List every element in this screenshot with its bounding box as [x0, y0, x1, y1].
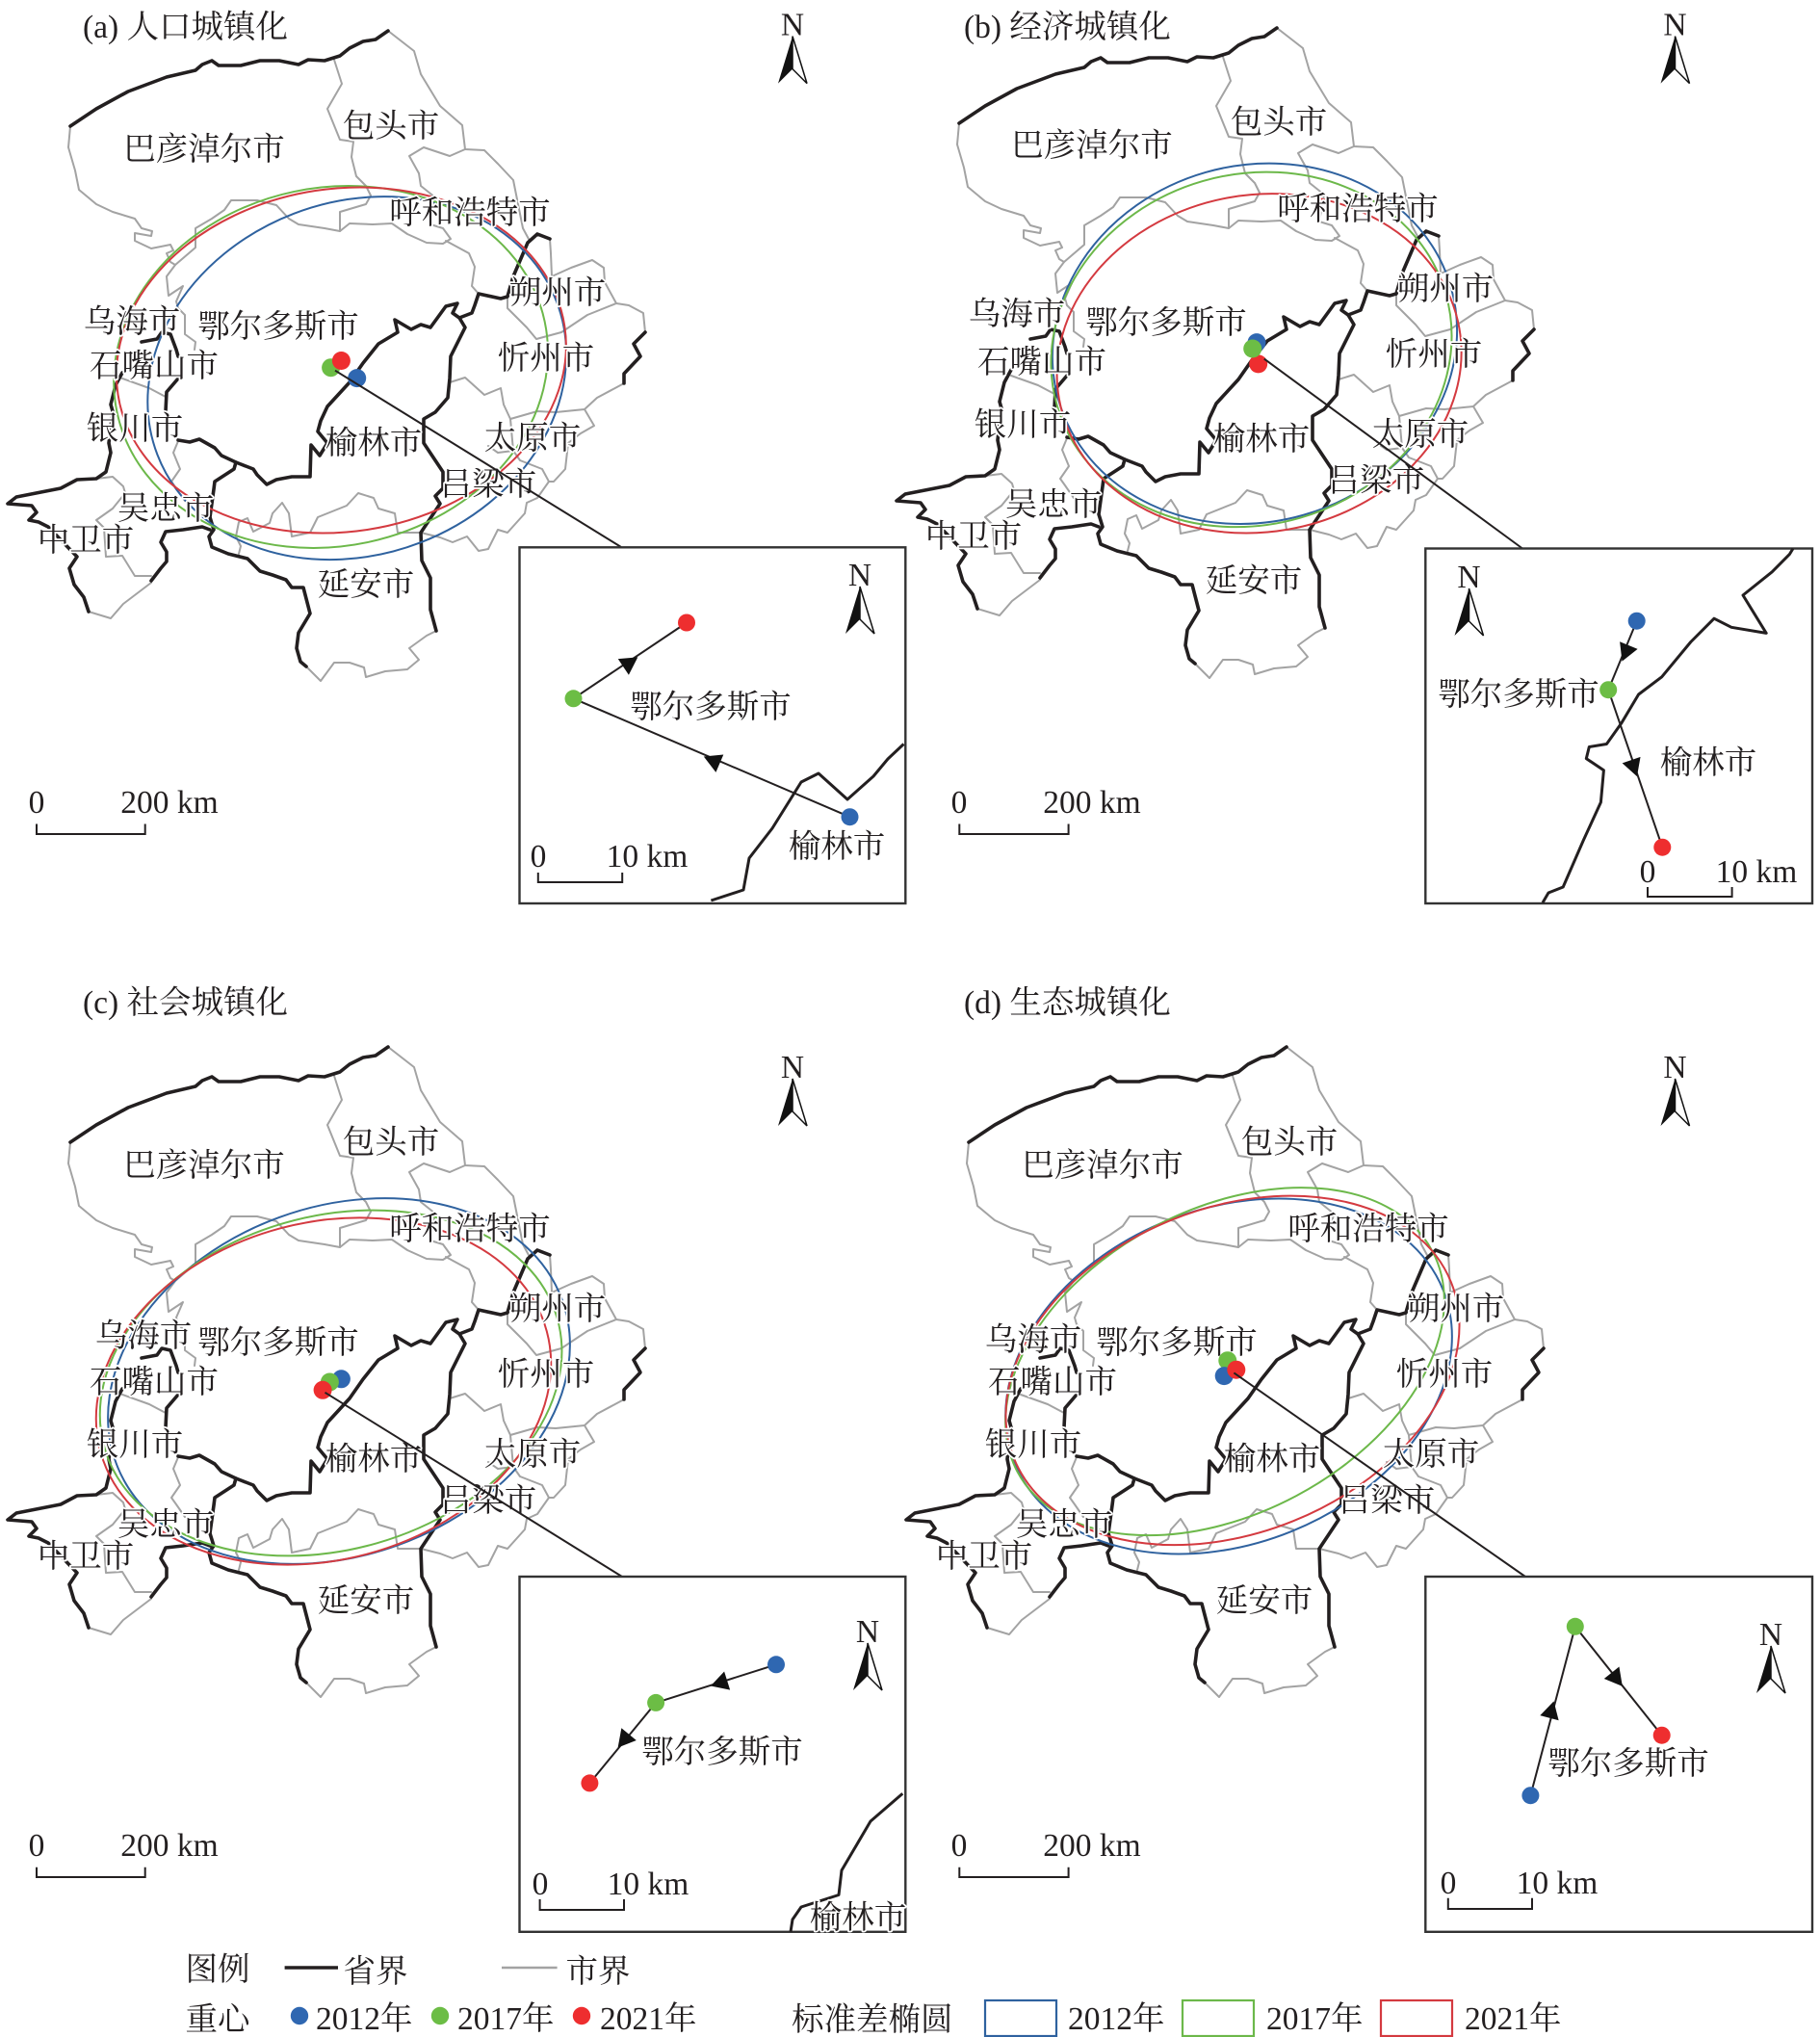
north arrow: panel a — [778, 8, 807, 84]
centroids: panel b — [1243, 333, 1267, 373]
city labels: panel a: 鄂尔多斯市 — [197, 309, 359, 345]
legend: centroids: 重心 — [185, 2002, 251, 2037]
scale bar: panel d: 200 km — [1043, 1828, 1141, 1864]
city labels: panel d: 吕梁市 — [1339, 1483, 1435, 1519]
scale bar: panel b: 0 — [951, 785, 967, 821]
inset: panel c: N — [856, 1614, 879, 1650]
city labels: panel a: 吴忠市 — [117, 491, 214, 527]
north arrow: panel d — [1660, 1050, 1689, 1126]
inset: panel a: 鄂尔多斯市 — [630, 690, 792, 725]
city labels: panel a: 榆林市 — [325, 426, 422, 461]
standard deviational ellipses: panel b — [1008, 117, 1500, 574]
city labels: panel b: 延安市 — [1206, 563, 1302, 599]
city labels: panel b: 鄂尔多斯市 — [1085, 305, 1247, 341]
legend: centroids: 2012年 — [316, 2001, 412, 2037]
north arrow: panel a: N — [781, 8, 804, 43]
callout line: panel a — [335, 371, 621, 547]
city labels: panel a: 呼和浩特市 — [389, 196, 551, 231]
city labels: panel c: 包头市 — [343, 1125, 439, 1161]
inset: panel a: 0 — [531, 839, 546, 875]
inset: panel c: 0 — [533, 1867, 548, 1902]
city labels: panel a: 银川市 — [87, 411, 183, 447]
city labels: panel c: 太原市 — [484, 1437, 581, 1473]
centroids: panel c — [314, 1370, 351, 1399]
city labels: panel d: 石嘴山市 — [988, 1365, 1117, 1400]
city labels: panel b: 榆林市 — [1213, 422, 1310, 457]
inset: panel d: 0 — [1441, 1866, 1456, 1901]
centroids: panel a — [322, 352, 366, 387]
centroids: panel d — [1215, 1351, 1245, 1385]
city labels: panel d: 包头市 — [1241, 1125, 1338, 1161]
city labels: panel c: 延安市 — [318, 1583, 414, 1619]
city labels: panel d: 朔州市 — [1408, 1292, 1504, 1327]
legend: boundaries: 市界 — [566, 1954, 630, 1990]
city labels: panel d: 鄂尔多斯市 — [1096, 1325, 1258, 1361]
scale bar: panel c: 200 km — [120, 1828, 219, 1864]
map: panel b boundaries — [897, 28, 1534, 678]
inset: panel c: 鄂尔多斯市 — [641, 1735, 803, 1770]
city labels: panel c: 榆林市 — [325, 1442, 422, 1477]
legend: standard deviational ellipses: 2012年 — [1068, 2001, 1165, 2037]
map: panel d boundaries — [906, 1047, 1544, 1697]
city labels: panel c: 鄂尔多斯市 — [197, 1325, 359, 1361]
inset: panel d: 10 km — [1517, 1866, 1598, 1901]
city labels: panel a — [38, 109, 606, 603]
scale bar: panel b: 200 km — [1043, 785, 1141, 821]
city labels: panel b: 石嘴山市 — [977, 345, 1106, 380]
inset: panel a: 10 km — [607, 839, 688, 875]
legend: standard deviational ellipses — [792, 2000, 1562, 2037]
standard deviational ellipses: panel d — [946, 1117, 1512, 1618]
legend: boundaries: 图例 — [185, 1952, 250, 1988]
city labels: panel b: 巴彦淖尔市 — [1011, 128, 1173, 164]
city labels: panel a: 忻州市 — [498, 341, 594, 377]
map: panel a boundaries — [8, 31, 645, 681]
city labels: panel c: 呼和浩特市 — [389, 1212, 551, 1247]
city labels: panel d: 延安市 — [1216, 1583, 1313, 1619]
inset: panel c — [520, 1577, 906, 1936]
city labels: panel b: 呼和浩特市 — [1277, 192, 1439, 227]
inset: panel a — [520, 547, 905, 903]
callout line: panel c — [325, 1393, 622, 1577]
scale bar: panel c — [29, 1828, 219, 1877]
inset: panel d — [1425, 1577, 1812, 1932]
city labels: panel a: 包头市 — [343, 109, 439, 144]
city labels: panel b: 忻州市 — [1386, 337, 1482, 373]
city labels: panel b: 银川市 — [975, 407, 1071, 443]
city labels: panel d: 吴忠市 — [1016, 1507, 1112, 1543]
city labels: panel a: 乌海市 — [84, 304, 180, 340]
scale bar: panel b — [951, 785, 1141, 834]
city labels: panel a: 中卫市 — [38, 523, 134, 559]
scale bar: panel d — [951, 1828, 1141, 1877]
title: panel d: (d) 生态城镇化 — [964, 985, 1171, 1021]
inset: panel a: N — [848, 558, 871, 593]
north arrow: panel b: N — [1663, 8, 1687, 43]
standard deviational ellipses: panel c — [56, 1136, 622, 1626]
inset: panel d: N — [1759, 1617, 1782, 1653]
city labels: panel a: 吕梁市 — [440, 467, 536, 503]
inset: panel d: 鄂尔多斯市 — [1547, 1746, 1709, 1782]
city labels: panel d: 忻州市 — [1396, 1357, 1493, 1393]
city labels: panel b: 朔州市 — [1397, 272, 1494, 307]
city labels: panel a: 巴彦淖尔市 — [123, 132, 285, 168]
city labels: panel d: 太原市 — [1383, 1437, 1479, 1473]
city labels: panel d: 呼和浩特市 — [1287, 1212, 1449, 1247]
inset: panel b — [1425, 549, 1812, 903]
callout line: panel b — [1264, 359, 1522, 549]
panel: (c) social urbanization — [8, 985, 906, 1936]
legend: centroids: 2021年 — [600, 2001, 697, 2037]
city labels: panel c: 乌海市 — [95, 1319, 192, 1354]
city labels: panel a: 太原市 — [484, 421, 581, 457]
inset: panel b: 10 km — [1716, 854, 1797, 890]
north arrow: panel b — [1660, 8, 1689, 84]
scale bar: panel a — [29, 785, 219, 834]
legend: centroids — [185, 2001, 697, 2037]
title: panel b: (b) 经济城镇化 — [964, 10, 1171, 45]
legend — [185, 1952, 1562, 2037]
north arrow: panel c: N — [781, 1050, 804, 1085]
city labels: panel b — [925, 105, 1494, 599]
city labels: panel d: 银川市 — [985, 1427, 1081, 1463]
scale bar: panel d: 0 — [951, 1828, 967, 1864]
legend: centroids: 2017年 — [457, 2001, 555, 2037]
inset: panel b: 0 — [1640, 854, 1655, 890]
north arrow: panel d: N — [1663, 1050, 1687, 1085]
inset: panel c: 榆林市 — [810, 1900, 906, 1936]
city labels: panel b: 包头市 — [1231, 105, 1327, 141]
city labels: panel c: 朔州市 — [509, 1292, 606, 1327]
inset: panel b: 榆林市 — [1660, 745, 1756, 781]
inset: panel b: 鄂尔多斯市 — [1438, 677, 1599, 713]
city labels: panel c: 吴忠市 — [117, 1507, 214, 1543]
city labels: panel d: 巴彦淖尔市 — [1022, 1148, 1183, 1184]
city labels: panel a: 朔州市 — [509, 275, 606, 311]
scale bar: panel a: 200 km — [120, 785, 219, 821]
city labels: panel c — [38, 1125, 606, 1619]
map: panel c boundaries — [8, 1047, 645, 1697]
legend: standard deviational ellipses: 2021年 — [1465, 2001, 1562, 2037]
city labels: panel b: 中卫市 — [925, 519, 1022, 555]
city labels: panel d — [936, 1125, 1504, 1619]
city labels: panel d: 乌海市 — [985, 1322, 1081, 1358]
city labels: panel d: 榆林市 — [1224, 1442, 1320, 1477]
scale bar: panel a: 0 — [29, 785, 44, 821]
panel: (d) ecological urbanization — [906, 985, 1812, 1932]
city labels: panel c: 银川市 — [87, 1427, 183, 1463]
city labels: panel a: 石嘴山市 — [90, 349, 219, 384]
standard deviational ellipses: panel a — [80, 137, 620, 619]
panel: (b) economic urbanization — [897, 8, 1812, 903]
title: panel a: (a) 人口城镇化 — [83, 10, 288, 45]
city labels: panel c: 巴彦淖尔市 — [123, 1148, 285, 1184]
north arrow: panel c — [778, 1050, 807, 1126]
title: panel c: (c) 社会城镇化 — [83, 985, 288, 1021]
scale bar: panel c: 0 — [29, 1828, 44, 1864]
panel: (a) population urbanization — [8, 8, 905, 903]
legend: standard deviational ellipses: 2017年 — [1266, 2001, 1364, 2037]
city labels: panel c: 吕梁市 — [440, 1483, 536, 1519]
inset: panel b: N — [1457, 560, 1481, 595]
inset: panel a: 榆林市 — [789, 829, 885, 865]
city labels: panel b: 乌海市 — [969, 297, 1065, 332]
inset: panel c: 10 km — [608, 1867, 689, 1902]
city labels: panel a: 延安市 — [318, 567, 414, 603]
city labels: panel b: 吕梁市 — [1328, 463, 1424, 499]
city labels: panel d: 中卫市 — [936, 1539, 1032, 1575]
legend: boundaries: 省界 — [343, 1954, 408, 1990]
city labels: panel c: 忻州市 — [498, 1357, 594, 1393]
city labels: panel c: 中卫市 — [38, 1539, 134, 1575]
legend: standard deviational ellipses: 标准差椭圆 — [792, 2002, 953, 2037]
city labels: panel b: 太原市 — [1372, 417, 1469, 453]
city labels: panel b: 吴忠市 — [1005, 487, 1102, 523]
city labels: panel c: 石嘴山市 — [90, 1365, 219, 1400]
callout line: panel d — [1234, 1372, 1525, 1577]
legend: boundaries — [185, 1952, 630, 1990]
